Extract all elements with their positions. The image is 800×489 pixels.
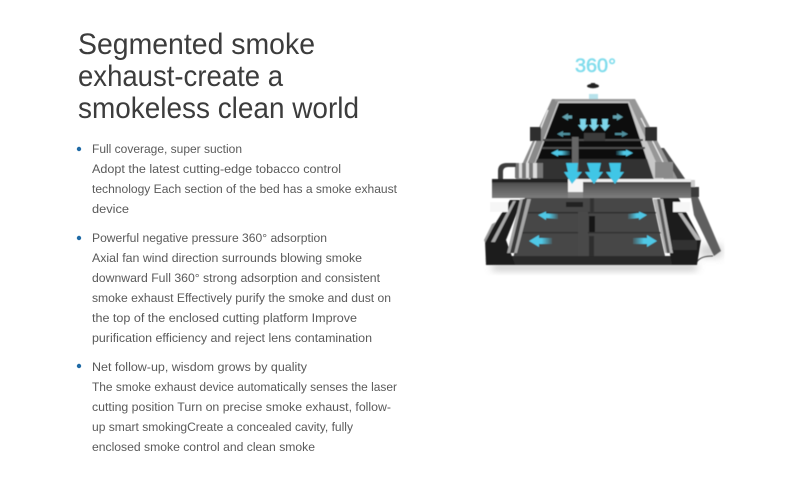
right rail assembly — [653, 197, 701, 265]
rear frame: rails and bed — [520, 99, 663, 180]
title: Segmented smoke — [78, 28, 315, 61]
text block: negative pressure: downward Full 360° strong adsorption and consistent — [92, 271, 381, 285]
text block: full coverage: device — [92, 202, 129, 216]
gantry beam — [492, 179, 699, 198]
sloped side plate — [691, 197, 721, 256]
title: exhaust-create a — [78, 60, 283, 93]
cutting head and drag arm — [572, 137, 578, 180]
text block: full coverage: Full coverage, super suction — [92, 142, 242, 156]
text block: full coverage — [77, 142, 398, 216]
airflow arrows: rear bed — [551, 114, 633, 156]
text block: net follow-up: enclosed smoke control and clean smoke — [92, 440, 315, 454]
text block: negative pressure: purification efficiency and reject lens contamination — [92, 331, 372, 345]
title: smokeless clean world — [78, 92, 359, 125]
text block: net follow-up: cutting position Turn on precise smoke exhaust, follow- — [92, 400, 391, 414]
illustration: laser cutting machine — [484, 83, 722, 270]
text block: full coverage: Adopt the latest cutting-edge tobacco control — [92, 162, 341, 176]
text block: negative pressure — [77, 231, 391, 345]
label: 360 degrees: 360° — [575, 55, 616, 77]
right outer plate — [655, 148, 690, 186]
text block: net follow-up: up smart smokingCreate a concealed cavity, fully — [92, 420, 354, 434]
text block: negative pressure: Powerful negative pressure 360° adsorption — [92, 231, 327, 245]
text block: negative pressure: the top of the enclosed cutting platform Improve — [92, 311, 357, 325]
text block: net follow-up: The smoke exhaust device automatically senses the laser — [92, 380, 397, 394]
rear side towers — [530, 127, 541, 141]
text block: net follow-up — [77, 360, 397, 454]
airflow arrows: front bed — [529, 212, 657, 247]
text block: net follow-up: Net follow-up, wisdom grows by quality — [92, 360, 308, 374]
front bed — [512, 197, 667, 265]
title — [78, 28, 359, 125]
text block: negative pressure: Axial fan wind direction surrounds blowing smoke — [92, 251, 362, 265]
left rail assembly — [484, 199, 531, 265]
text block: full coverage: technology Each section of the bed has a smoke exhaust — [92, 182, 398, 196]
airflow arrows: gantry — [564, 163, 624, 184]
smoke fan on top — [586, 83, 600, 107]
text block: negative pressure: smoke exhaust Effectively purify the smoke and dust on — [92, 291, 391, 305]
rear bed cross bars — [543, 139, 643, 141]
machine shadow — [492, 264, 697, 270]
